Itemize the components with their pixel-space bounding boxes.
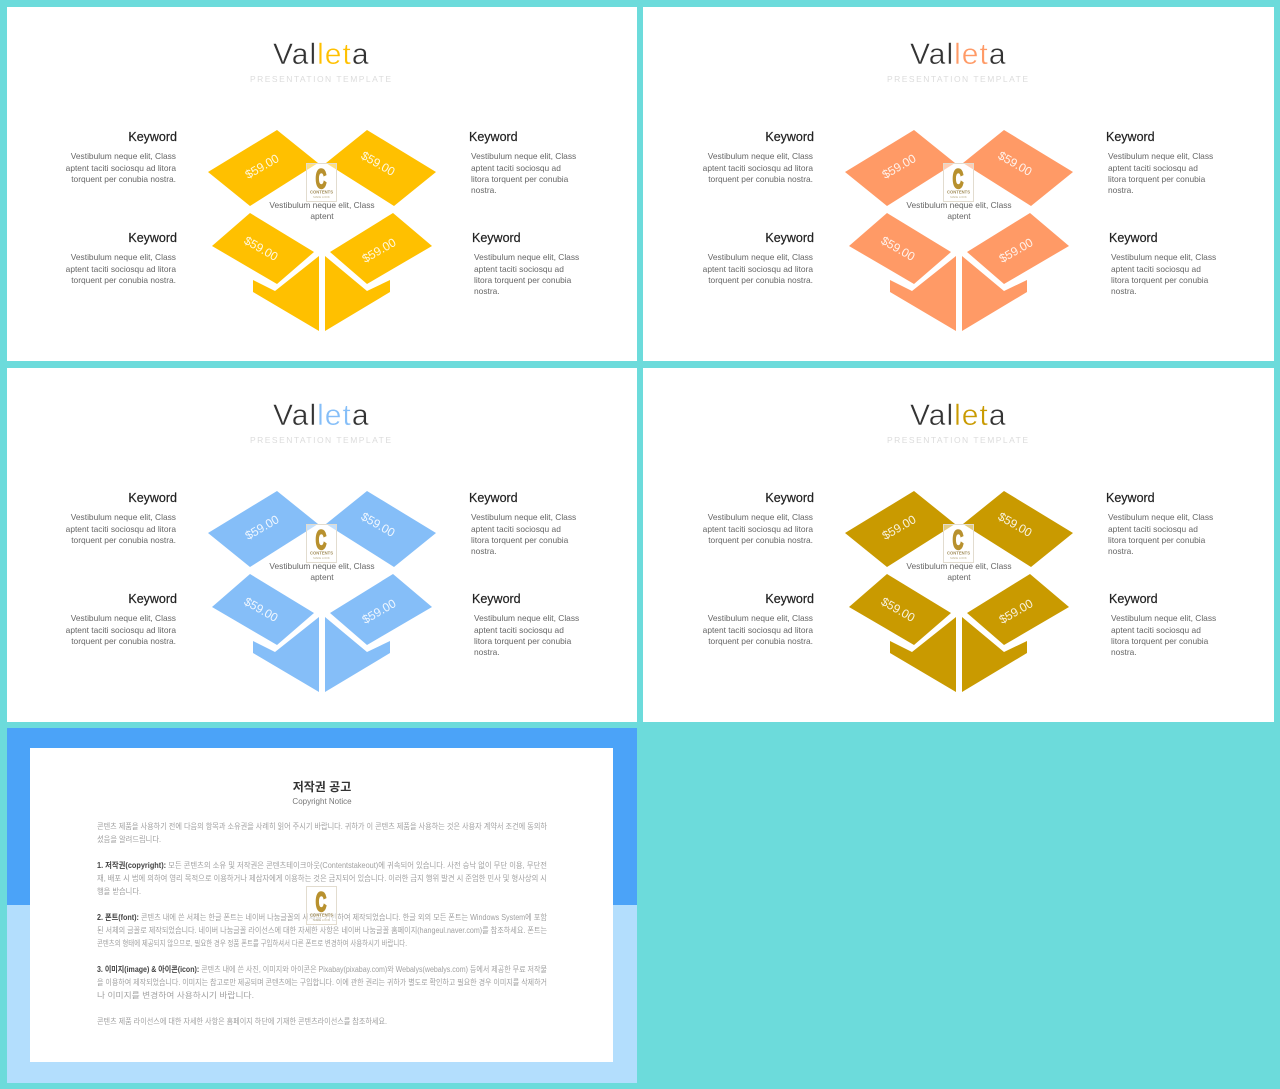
text block: font clause: 된 서체의 글꼴로 제작되었습니다. 네이버 나눔글꼴 라이선스에 대한 자세한 사항은 네이버 나눔글꼴 홈페이지(hangeul.naver.com)를 참조하세요. 폰트는 — [97, 925, 547, 935]
text block: top right — [1106, 130, 1213, 195]
text block: bottom right: nostra. — [474, 286, 500, 296]
text block: font clause: 2. 폰트(font): 콘텐츠 내에 쓴 서체는 한글 폰트는 네이버 나눔글꼴의 서체를 기반하여 제작되었습니다. 한글 외의 모든 폰트는 Windows System에 포함 — [97, 912, 548, 922]
text block: font clause: 콘텐츠의 형태에 제공되지 않으므로, 필요한 경우 정품 폰트를 구입하셔서 다른 폰트로 변경하여 사용하시기 바랍니다. — [97, 938, 407, 948]
text block: top left: Keyword — [765, 130, 814, 144]
text block: top right: nostra. — [1108, 185, 1134, 195]
chart: open box: $59.00 — [879, 233, 918, 264]
icon: watermark logo: CONTENTS — [947, 190, 970, 194]
text block: top left: Vestibulum neque elit, Class — [708, 151, 813, 161]
icon: watermark logo — [306, 163, 336, 202]
chart: open box: $59.00 — [997, 596, 1036, 627]
text block: top right — [469, 130, 576, 195]
icon: watermark logo: CONTENTS — [947, 550, 970, 556]
text block: bottom left: aptent taciti sociosqu ad litora — [703, 264, 813, 274]
text block: bottom left: Keyword — [765, 592, 814, 606]
text block: top left: aptent taciti sociosqu ad litora — [66, 524, 176, 534]
icon: watermark logo: C — [316, 886, 327, 917]
text block: top right: Keyword — [1106, 491, 1155, 505]
text block: top left: Vestibulum neque elit, Class — [71, 512, 176, 522]
text block: closing note: 콘텐츠 제품 라이선스에 대한 자세한 사항은 홈페이지 하단에 기재한 콘텐츠라이선스를 참조하세요. — [97, 1016, 387, 1026]
text block: bottom left: aptent taciti sociosqu ad litora — [66, 264, 176, 274]
text block: center: Vestibulum neque elit, Class — [906, 561, 1012, 571]
chart: open box: $59.00 — [243, 151, 282, 182]
text block: top right: aptent taciti sociosqu ad — [1108, 163, 1198, 173]
text block: image clause: 나 이미지를 변경하여 사용하시기 바랍니다. — [97, 990, 254, 1000]
title: Valleta — [910, 399, 1007, 432]
text block: bottom left: aptent taciti sociosqu ad litora — [703, 625, 813, 635]
chart: open box — [845, 130, 1073, 331]
text block: bottom right: Keyword — [1109, 231, 1158, 245]
text block: top right: Vestibulum neque elit, Class — [1108, 151, 1213, 161]
panel: orange slide — [643, 7, 1274, 361]
text block: bottom left — [66, 231, 177, 285]
text block: bottom left: Keyword — [128, 231, 177, 245]
text block: top right: nostra. — [471, 546, 497, 556]
text block: bottom left: Vestibulum neque elit, Class — [708, 613, 813, 623]
text block: bottom right: Vestibulum neque elit, Class — [474, 613, 579, 623]
text block: intro — [97, 821, 548, 844]
text block: copyright clause: 1. 저작권(copyright): 모든 콘텐츠의 소유 및 저작권은 콘텐츠테이크아웃(Contentstakeout)에 귀속되어 있습니다. 사전 승낙 없이 무단 이용, 무단전 — [97, 860, 547, 870]
text block: top left: torquent per conubia nostra. — [708, 535, 813, 545]
chart: open box — [208, 491, 436, 692]
text block: bottom right: aptent taciti sociosqu ad — [1111, 264, 1201, 274]
title: Valleta — [273, 399, 370, 432]
text block: font clause — [97, 912, 548, 948]
text block: bottom left: aptent taciti sociosqu ad litora — [66, 625, 176, 635]
text block: center: Vestibulum neque elit, Class — [269, 561, 375, 571]
text block: top left — [66, 491, 177, 545]
text block: top left — [703, 130, 814, 184]
icon: watermark logo — [306, 524, 336, 562]
panel: blue slide — [7, 368, 637, 722]
text block: top left: torquent per conubia nostra. — [71, 535, 176, 545]
text block: top right: litora torquent per conubia — [1108, 174, 1206, 184]
text block: bottom right: litora torquent per conubia — [1111, 636, 1209, 646]
chart: open box: $59.00 — [243, 512, 282, 543]
heading: copyright notice: Copyright Notice — [292, 797, 352, 806]
subtitle: PRESENTATION TEMPLATE — [250, 74, 391, 84]
text block: bottom right: Keyword — [472, 592, 521, 606]
text block: top left: Keyword — [128, 491, 177, 505]
icon: watermark logo: MAKE LOOK — [950, 556, 967, 560]
text block: center: Vestibulum neque elit, Class — [906, 200, 1012, 210]
chart: open box: $59.00 — [360, 596, 399, 627]
text block: image clause — [97, 964, 547, 1000]
chart: open box: $59.00 — [242, 233, 281, 264]
icon: watermark logo — [944, 163, 974, 202]
icon: watermark logo: CONTENTS — [310, 190, 333, 194]
text block: top right — [469, 491, 576, 556]
text block: intro: 콘텐츠 제품을 사용하기 전에 다음의 항목과 소유권을 사례히 읽어 주시기 바랍니다. 귀하가 이 콘텐츠 제품을 사용하는 것은 사용자 계약서 조건에 동의하 — [97, 821, 548, 831]
text block: center — [906, 561, 1012, 582]
icon: watermark logo: C — [316, 163, 327, 194]
text block: top left: Vestibulum neque elit, Class — [708, 512, 813, 522]
text block: top right: nostra. — [1108, 546, 1134, 556]
icon: watermark logo: MAKE LOOK — [313, 556, 330, 560]
chart: open box — [208, 130, 436, 331]
panel: copyright notice — [7, 728, 637, 1083]
text block: top left: aptent taciti sociosqu ad litora — [66, 163, 176, 173]
text block: bottom right: Keyword — [1109, 592, 1158, 606]
text block: image clause: 3. 이미지(image) & 아이콘(icon): 콘텐츠 내에 쓴 사진, 이미지와 아이콘은 Pixabay(pixabay.com)와 Webalys(webalys.com) 등에서 제공한 무료 저작물 — [97, 964, 547, 974]
icon: watermark logo — [944, 524, 974, 562]
text block: top right: Keyword — [1106, 130, 1155, 144]
heading: copyright notice: 저작권 공고 — [293, 779, 351, 794]
icon: watermark logo: MAKE LOOK — [950, 195, 967, 199]
text block: bottom left: torquent per conubia nostra. — [71, 636, 176, 646]
text block: top left: aptent taciti sociosqu ad litora — [703, 524, 813, 534]
text block: bottom left — [703, 592, 814, 646]
icon: watermark logo: MAKE LOOK — [313, 195, 330, 199]
text block: bottom right: Vestibulum neque elit, Class — [1111, 252, 1216, 262]
text block: bottom right — [1109, 231, 1216, 296]
icon: watermark logo: MAKE LOOK — [313, 918, 330, 922]
text block: bottom left: Vestibulum neque elit, Class — [708, 252, 813, 262]
text block: top right — [1106, 491, 1213, 556]
text block: bottom right: aptent taciti sociosqu ad — [1111, 625, 1201, 635]
text block: copyright clause: 행을 받습니다. — [97, 886, 141, 896]
text block: top right: nostra. — [471, 185, 497, 195]
text block: bottom right: Vestibulum neque elit, Class — [474, 252, 579, 262]
subtitle: PRESENTATION TEMPLATE — [887, 435, 1028, 445]
subtitle: PRESENTATION TEMPLATE — [250, 435, 391, 445]
text block: bottom right — [472, 231, 579, 296]
text block: top right: Vestibulum neque elit, Class — [1108, 512, 1213, 522]
text block: intro: 셨음을 알려드립니다. — [97, 834, 161, 844]
text block: center: aptent — [310, 211, 334, 221]
text block: bottom right: litora torquent per conubia — [474, 275, 572, 285]
text block: bottom right: nostra. — [1111, 286, 1137, 296]
chart: open box: $59.00 — [360, 235, 399, 266]
chart: open box: $59.00 — [359, 148, 398, 179]
text block: bottom left — [66, 592, 177, 646]
text block: bottom right: litora torquent per conubia — [474, 636, 572, 646]
text block: top left — [703, 491, 814, 545]
subtitle: PRESENTATION TEMPLATE — [887, 74, 1028, 84]
text block: center — [269, 200, 375, 221]
text block: top right: aptent taciti sociosqu ad — [471, 524, 561, 534]
text block: top left — [66, 130, 177, 184]
text block: center: aptent — [947, 211, 971, 221]
chart: open box: $59.00 — [879, 594, 918, 625]
text block: bottom left: torquent per conubia nostra. — [71, 275, 176, 285]
text block: bottom left: Vestibulum neque elit, Class — [71, 252, 176, 262]
heading: copyright notice — [292, 779, 352, 806]
text block: copyright clause: 재, 배포 시 법에 의하여 영리 목적으로 이용하거나 제삼자에게 이용하는 것은 금지되어 있습니다. 이러한 금지 행위 발견 시 준엄한 민사 및 형사상의 시 — [97, 873, 547, 883]
icon: watermark logo: CONTENTS — [310, 550, 333, 556]
text block: top left: Vestibulum neque elit, Class — [71, 151, 176, 161]
text block: center: aptent — [947, 572, 971, 582]
text block: top right: Keyword — [469, 491, 518, 505]
text block: bottom left: Keyword — [128, 592, 177, 606]
text block: top right: Vestibulum neque elit, Class — [471, 512, 576, 522]
chart: open box: $59.00 — [880, 151, 919, 182]
text block: top right: litora torquent per conubia — [471, 535, 569, 545]
panel: gold slide — [643, 368, 1274, 722]
text block: bottom right: nostra. — [474, 647, 500, 657]
icon: watermark logo: C — [953, 163, 964, 194]
text block: top left: torquent per conubia nostra. — [708, 174, 813, 184]
text block: center — [906, 200, 1012, 221]
text block: top left: Keyword — [765, 491, 814, 505]
text block: copyright clause — [97, 860, 547, 896]
icon: watermark logo: C — [316, 524, 327, 555]
icon: watermark logo: C — [953, 524, 964, 555]
text block: top right: Vestibulum neque elit, Class — [471, 151, 576, 161]
chart: open box: $59.00 — [996, 509, 1035, 540]
text block: top right: Keyword — [469, 130, 518, 144]
icon: watermark logo: CONTENTS — [310, 912, 333, 918]
chart: open box: $59.00 — [880, 512, 919, 543]
text block: top left: torquent per conubia nostra. — [71, 174, 176, 184]
text block: bottom right: aptent taciti sociosqu ad — [474, 264, 564, 274]
icon: watermark logo — [306, 886, 336, 924]
text block: bottom right: litora torquent per conubia — [1111, 275, 1209, 285]
text block: top left: Keyword — [128, 130, 177, 144]
text block: center: aptent — [310, 572, 334, 582]
chart: open box: $59.00 — [997, 235, 1036, 266]
text block: top right: aptent taciti sociosqu ad — [471, 163, 561, 173]
text block: bottom left: Keyword — [765, 231, 814, 245]
text block: image clause: 을 이용하여 제작되었습니다. 이미지는 참고로만 제공되며 콘텐츠에는 구입합니다. 이에 관한 권리는 귀하가 별도로 확인하고 필요한 경우 이미지를 삭제하거 — [97, 977, 547, 987]
text block: center — [269, 561, 375, 582]
text block: bottom right: Keyword — [472, 231, 521, 245]
text block: bottom left: torquent per conubia nostra. — [708, 275, 813, 285]
text block: bottom right: Vestibulum neque elit, Class — [1111, 613, 1216, 623]
chart: open box — [845, 491, 1073, 692]
title: Valleta — [273, 38, 370, 71]
text block: bottom right — [1109, 592, 1216, 657]
chart: open box: $59.00 — [242, 594, 281, 625]
text block: center: Vestibulum neque elit, Class — [269, 200, 375, 210]
text block: bottom right — [472, 592, 579, 657]
chart: open box: $59.00 — [359, 509, 398, 540]
chart: open box: $59.00 — [996, 148, 1035, 179]
panel: yellow slide — [7, 7, 637, 361]
text block: bottom left: torquent per conubia nostra. — [708, 636, 813, 646]
text block: bottom right: aptent taciti sociosqu ad — [474, 625, 564, 635]
text block: top right: litora torquent per conubia — [471, 174, 569, 184]
text block: bottom left: Vestibulum neque elit, Class — [71, 613, 176, 623]
text block: top right: litora torquent per conubia — [1108, 535, 1206, 545]
text block: bottom left — [703, 231, 814, 285]
text block: top left: aptent taciti sociosqu ad litora — [703, 163, 813, 173]
title: Valleta — [910, 38, 1007, 71]
text block: top right: aptent taciti sociosqu ad — [1108, 524, 1198, 534]
text block: bottom right: nostra. — [1111, 647, 1137, 657]
